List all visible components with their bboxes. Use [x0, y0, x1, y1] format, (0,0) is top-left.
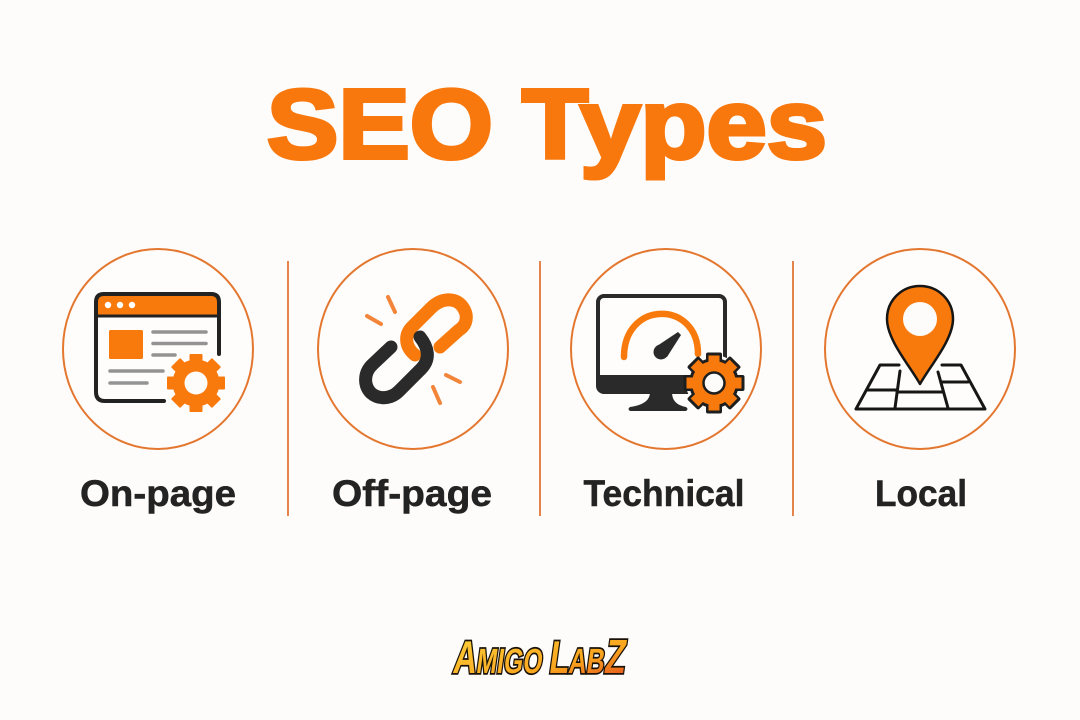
circle: off-page: [318, 249, 508, 449]
icon: monitor with speedometer and gear: [597, 296, 744, 414]
panel: local: [825, 249, 1015, 514]
icon: broken chain link: [366, 297, 466, 403]
circle: on-page: [63, 249, 253, 449]
label: local: Local: [875, 473, 967, 514]
label: on-page: On-page: [80, 473, 236, 514]
panel: on-page: [63, 249, 253, 514]
logo: Amigo Labz: AMIGO LABZ: [450, 630, 630, 684]
circle: technical: [571, 249, 761, 449]
panel: technical: [571, 249, 761, 514]
circle: local: [825, 249, 1015, 449]
title: [267, 69, 827, 179]
label: technical: Technical: [584, 473, 744, 514]
title: Types: [522, 69, 827, 179]
panel: off-page: [318, 249, 508, 514]
title: SEO: [267, 69, 493, 179]
icon: browser window with gear: [96, 294, 225, 412]
icon: map pin on map: [856, 286, 985, 409]
label: off-page: Off-page: [332, 473, 492, 514]
